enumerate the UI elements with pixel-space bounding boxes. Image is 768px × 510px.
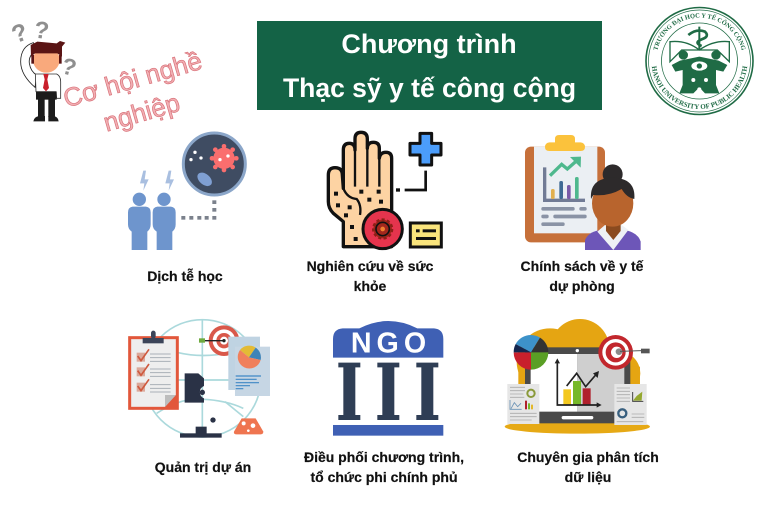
panel: preventive health policy: [521, 135, 644, 294]
panel: project management: [130, 320, 270, 475]
label: khỏe: [354, 278, 387, 294]
panel: career opportunities badge: [8, 16, 205, 138]
title banner: Thạc sỹ y tế công cộng: [283, 73, 576, 103]
icon: university seal logo: HANOI UNIVERSITY OF PUBLIC HEALTH: [652, 66, 748, 109]
icon: NGO building: [333, 321, 443, 436]
icon: clipboard with chart and woman: [525, 135, 641, 250]
panel: data analyst: [505, 319, 659, 485]
title banner: [257, 21, 602, 110]
label: Dịch tễ học: [147, 268, 223, 284]
panel: health research: [307, 132, 441, 294]
label: Nghiên cứu về sức: [307, 258, 434, 274]
icon: hand with virus and cross: [328, 132, 441, 249]
icon: thinking man with question marks: ?: [32, 16, 51, 45]
label: [521, 258, 644, 294]
label: Chính sách về y tế: [521, 258, 644, 274]
icon: NGO building: NGO: [351, 327, 431, 359]
label: [304, 449, 464, 485]
label: dự phòng: [549, 278, 615, 294]
label: Điều phối chương trình,: [304, 449, 464, 465]
panel: NGO coordination: [304, 321, 464, 485]
panel: epidemiology: [128, 133, 245, 284]
label: dữ liệu: [565, 469, 611, 485]
badge heading: nghiệp: [100, 87, 183, 138]
icon: thinking man with question marks: ?: [59, 52, 79, 81]
icon: university seal logo: TRƯỜNG ĐẠI HỌC Y TẾ CÔNG CỘNG: [653, 13, 746, 50]
icon: thinking man with question marks: ?: [8, 19, 32, 49]
label: tổ chức phi chính phủ: [310, 469, 458, 485]
label: [307, 258, 434, 294]
icon: globe with clipboard and target: [130, 320, 270, 438]
icon: university seal logo: [645, 6, 754, 116]
badge heading: Cơ hội nghề: [60, 45, 205, 113]
label: Quản trị dự án: [155, 459, 251, 475]
icon: people and microscope view: [128, 133, 245, 250]
title banner: Chương trình: [341, 29, 517, 59]
label: [517, 449, 659, 485]
icon: monitor with charts: [505, 319, 650, 434]
icon: thinking man with question marks: [8, 16, 79, 121]
label: Chuyên gia phân tích: [517, 449, 659, 465]
